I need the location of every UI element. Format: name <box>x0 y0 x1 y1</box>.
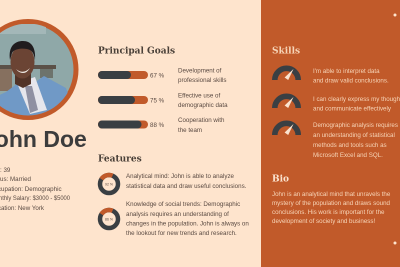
goal 1 <box>98 68 226 84</box>
goal 2 <box>98 92 228 109</box>
goal 3: the team <box>178 127 202 134</box>
personal details <box>0 167 71 212</box>
bio text: mystery of the population and draws sound <box>272 200 391 207</box>
feature 2: changes in the population. John is always on <box>126 220 249 228</box>
feature 1 <box>100 173 247 193</box>
goal 2: 75 % <box>150 98 165 104</box>
portrait <box>0 22 76 125</box>
bio text <box>272 191 391 225</box>
goal 3: 88 % <box>150 122 165 129</box>
feature 2 <box>100 201 249 237</box>
goal 1: Development of <box>178 68 222 74</box>
gauge 3 <box>275 123 298 135</box>
goal 1: professional skills <box>178 77 226 84</box>
panel: right background <box>261 0 400 267</box>
goal 2: demographic data <box>178 102 228 109</box>
feature 1: Analytical mind: John is able to analyze <box>126 173 235 180</box>
feature 2: the lookout for new trends and research. <box>126 230 237 237</box>
bio text: John is an analytical mind that unravels the <box>272 191 391 198</box>
skill text 3: an understanding of statistical <box>313 132 395 139</box>
skill text 1 <box>313 68 389 84</box>
feature 2: 86 % <box>105 217 113 221</box>
dot top <box>394 14 396 16</box>
bio text: conclusions. His work is important for the <box>272 209 385 216</box>
heading: principal goals: Principal Goals <box>98 46 175 56</box>
heading: features: Features <box>98 154 142 164</box>
goal 3 <box>98 117 225 134</box>
skill text 3: Demographic analysis requires <box>313 122 398 129</box>
feature 1: 92 % <box>105 182 113 186</box>
skill text 2: and communicate effectively <box>313 106 392 112</box>
heading: bio: Bio <box>272 174 289 184</box>
bio text: development of society and business! <box>272 218 375 225</box>
gauge 2 <box>275 96 298 108</box>
gauge 1 <box>275 68 298 80</box>
feature 1: statistical data and draw useful conclusions. <box>126 183 247 190</box>
skill text 3 <box>313 122 398 159</box>
feature 2: Knowledge of social trends: Demographic <box>126 201 240 208</box>
goal 3: Cooperation with <box>178 117 225 124</box>
goal 1: 67 % <box>150 72 165 80</box>
goal 2: Effective use of <box>178 92 220 100</box>
feature 2: analysis requires an understanding of <box>126 211 229 218</box>
skill text 3: Microsoft Excel and SQL. <box>313 152 383 159</box>
heading: skills: Skills <box>272 46 300 56</box>
dot bottom <box>394 242 396 244</box>
skill text 1: I'm able to interpret data <box>313 68 380 75</box>
skill text 1: and draw valid conclusions. <box>313 78 389 84</box>
skill text 3: methods and tools such as <box>313 142 387 149</box>
skill text 2 <box>313 96 400 112</box>
